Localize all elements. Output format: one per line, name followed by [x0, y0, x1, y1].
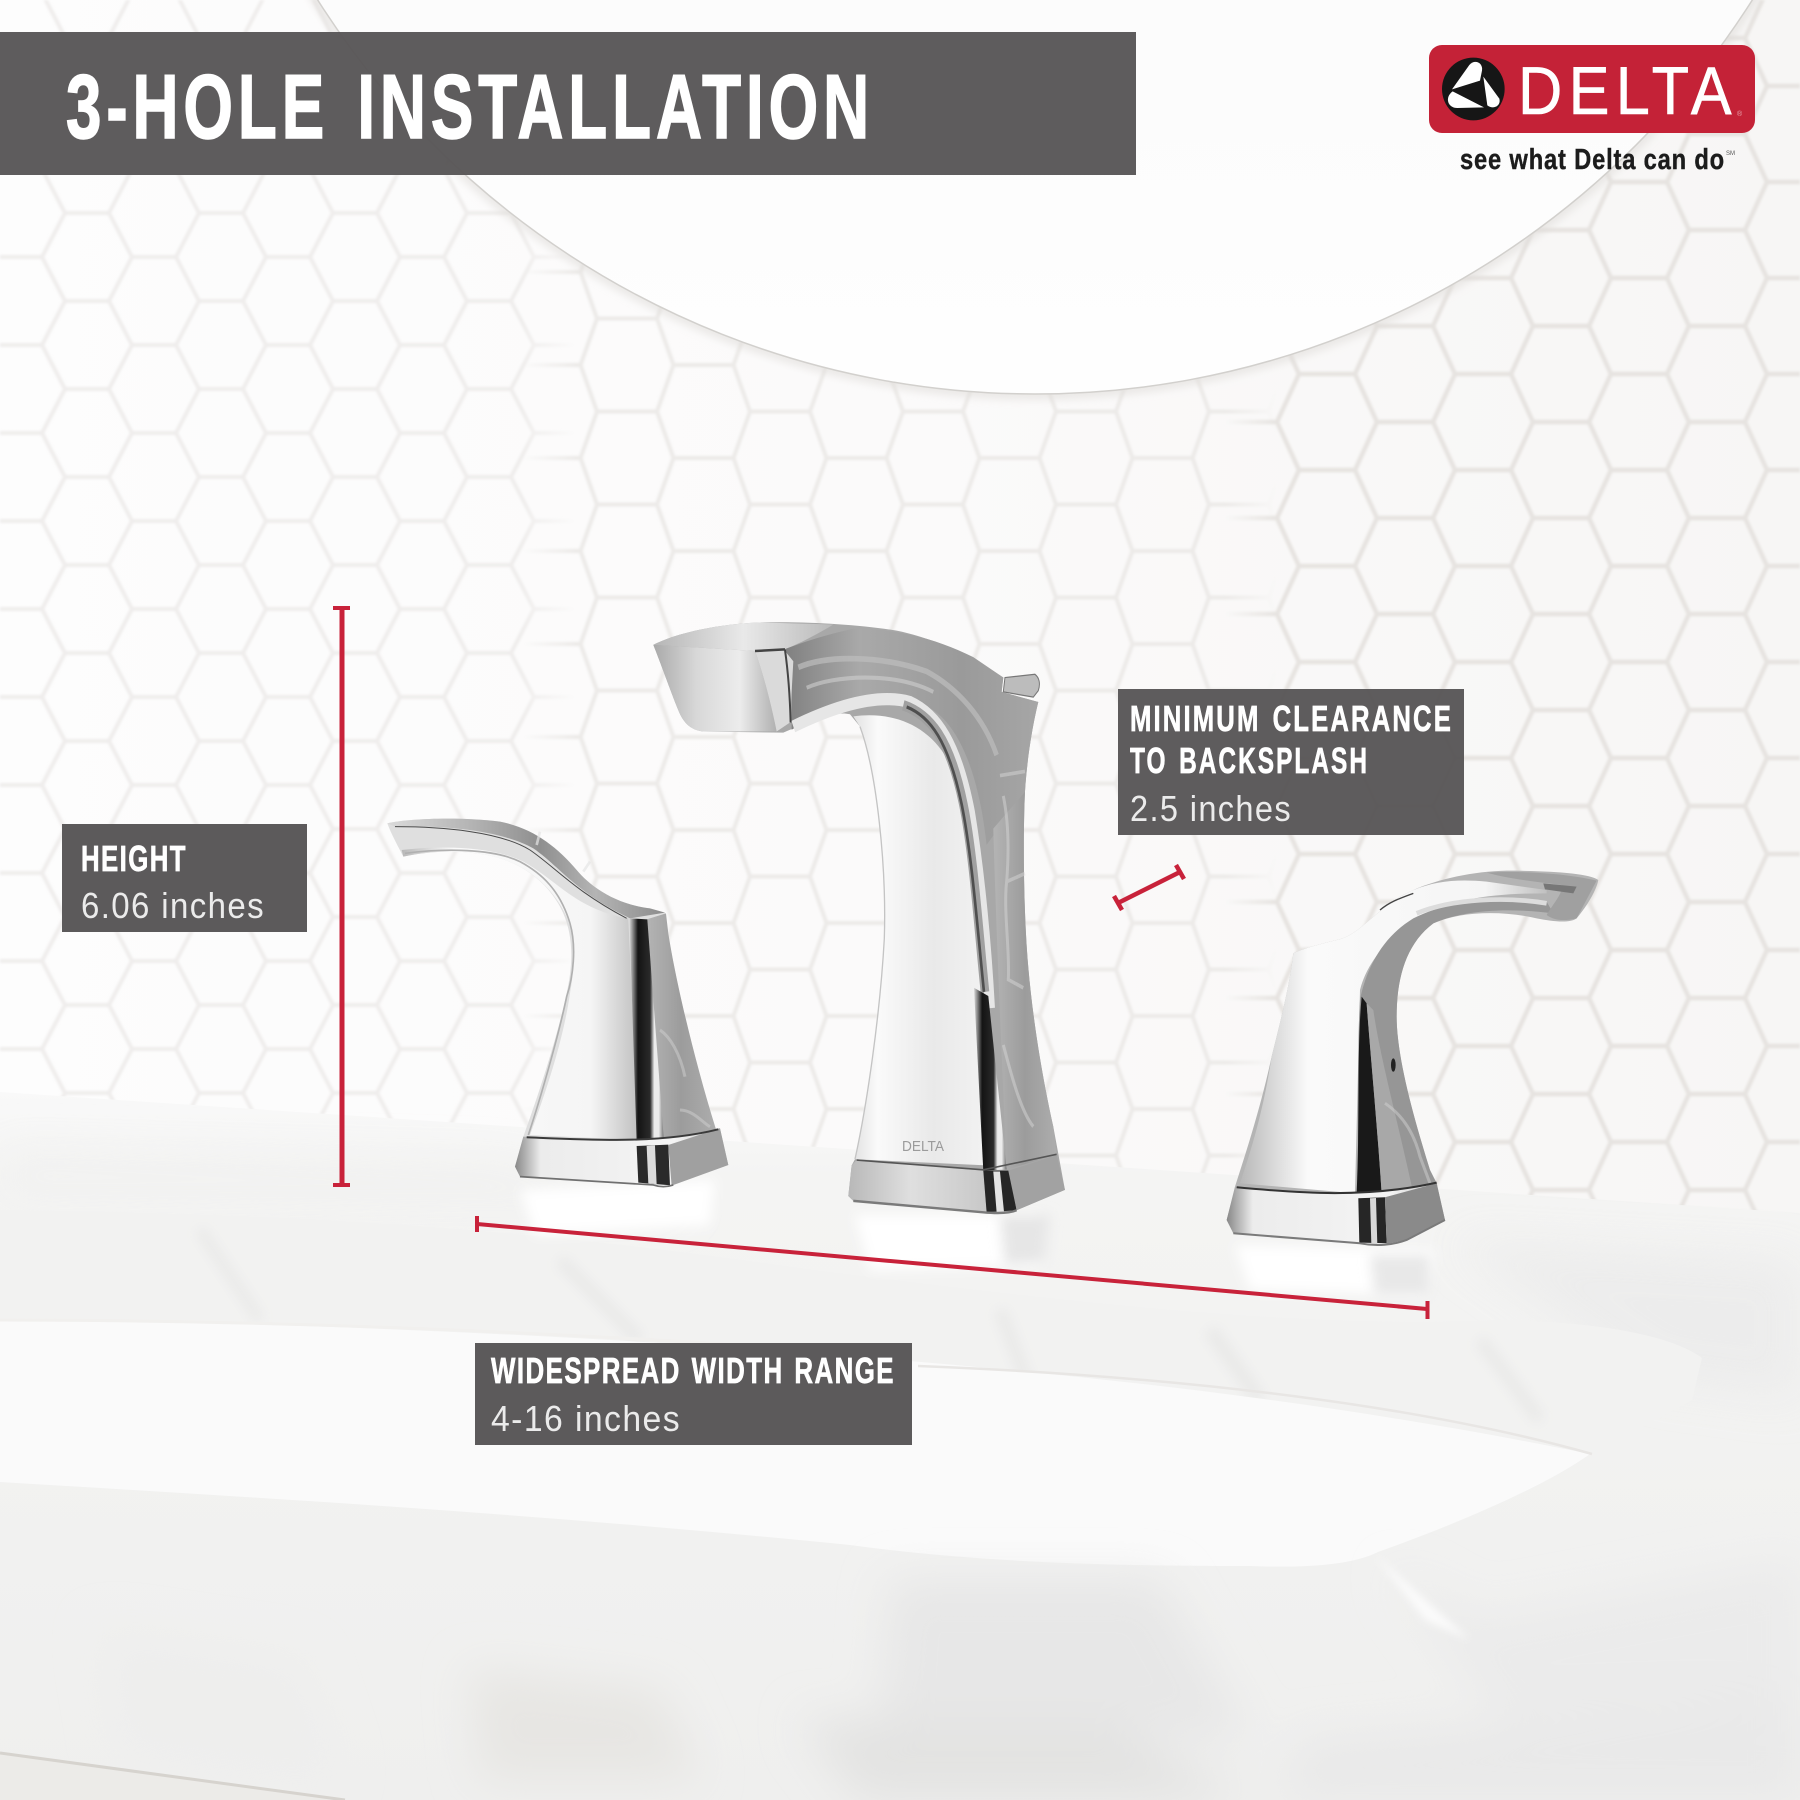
- callout: widespread width range: WIDESPREAD WIDTH RANGE: [491, 1350, 895, 1391]
- wordmark: DELTA: [1518, 53, 1738, 129]
- sink basin: [0, 1320, 1590, 1567]
- spout top surface: [653, 622, 833, 651]
- title banner: [0, 32, 1136, 175]
- callout: minimum clearance: [1118, 689, 1464, 835]
- background: hexagon tile wall: [0, 0, 1800, 1300]
- spout front body: [853, 715, 987, 1165]
- faucet reflections: [520, 1180, 1435, 1295]
- handle base: [1227, 1183, 1445, 1245]
- right side panel: [993, 792, 1057, 1169]
- title text: 3-HOLE INSTALLATION: [66, 57, 874, 158]
- callout: minimum clearance: MINIMUM CLEARANCE: [1130, 698, 1453, 739]
- clearance dimension line: [1114, 865, 1184, 910]
- Delta logo: SM: [1726, 151, 1735, 157]
- spout base: [848, 1160, 987, 1212]
- pop-up lever: [1003, 674, 1039, 697]
- callout: minimum clearance: TO BACKSPLASH: [1130, 740, 1369, 781]
- engraved DELTA mark on spout: DELTA: [902, 1138, 944, 1155]
- height dimension line: [333, 606, 350, 1187]
- width dimension line: [477, 1216, 1428, 1319]
- left handle: [387, 819, 728, 1187]
- spout arm: [783, 629, 1038, 845]
- callout: widespread width range: [475, 1343, 912, 1445]
- Delta logo: ®: [1737, 110, 1743, 118]
- callout: widespread width range: 4-16 inches: [491, 1398, 681, 1439]
- tagline: see what Delta can do: [1460, 144, 1725, 176]
- Delta logo: [1429, 45, 1755, 176]
- round mirror: [179, 0, 1800, 400]
- black reflection stripe: [974, 988, 1007, 1171]
- right handle: [1227, 871, 1598, 1245]
- countertop front edge: [0, 1753, 345, 1800]
- callout: height: HEIGHT: [81, 838, 187, 879]
- lower marble veins: [100, 1560, 1800, 1800]
- icon: Delta tri-lobe mark: [1442, 58, 1505, 120]
- centre spout: [653, 622, 1065, 1213]
- sink back wall: [0, 1210, 1702, 1454]
- callout: height: [62, 824, 307, 932]
- marble countertop and sink: [0, 1092, 1800, 1800]
- callout: minimum clearance: 2.5 inches: [1130, 788, 1292, 829]
- spout nose face: [653, 645, 777, 731]
- callout: height: 6.06 inches: [81, 885, 265, 926]
